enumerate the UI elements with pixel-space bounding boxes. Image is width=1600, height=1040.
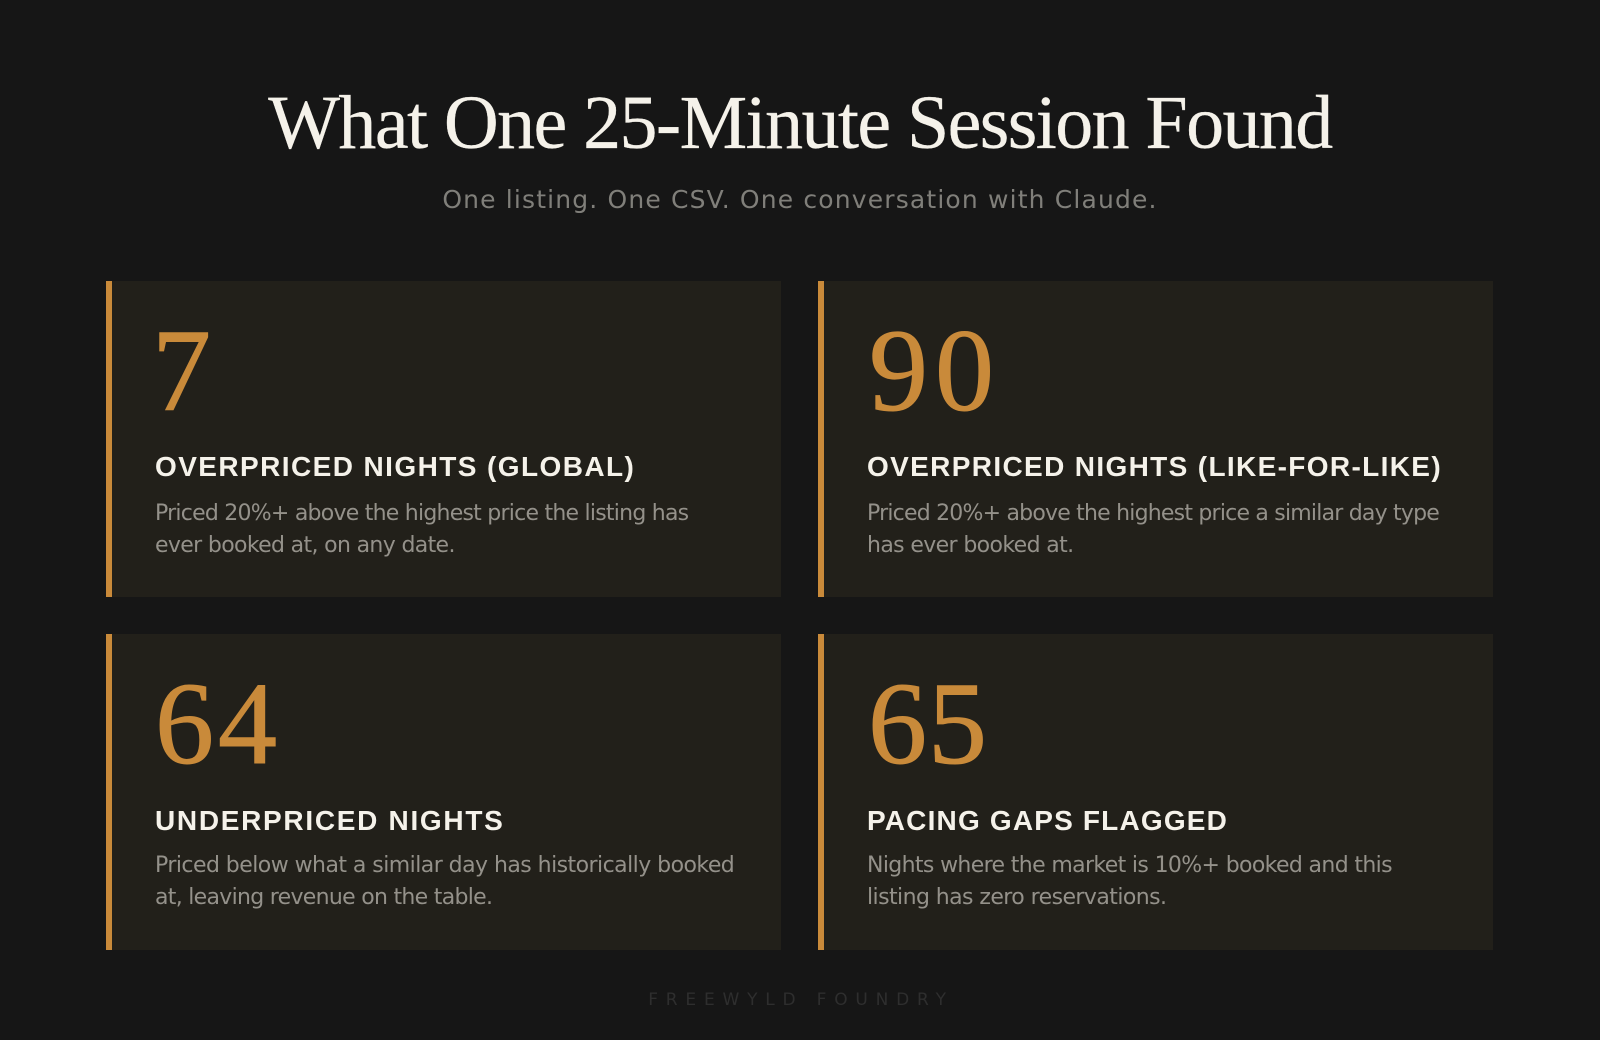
description: overpriced global bbox=[155, 501, 688, 558]
description: overpriced global: Priced 20%+ above the highest price the listing has bbox=[155, 501, 688, 526]
heading: underpriced nights: UNDERPRICED NIGHTS bbox=[155, 805, 505, 836]
heading: pacing gaps flagged: PACING GAPS FLAGGED bbox=[867, 805, 1228, 836]
panel: overpriced nights global bbox=[106, 281, 781, 597]
heading: overpriced nights like-for-like: OVERPRICED NIGHTS (LIKE-FOR-LIKE) bbox=[867, 451, 1442, 482]
description: pacing gaps: Nights where the market is 10%+ booked and this bbox=[867, 853, 1392, 878]
panel: overpriced nights like-for-like bbox=[818, 281, 1493, 597]
stat: 90: 90 bbox=[869, 305, 1001, 436]
description: overpriced global: ever booked at, on any date. bbox=[155, 533, 455, 558]
stat: 64: 64 bbox=[155, 658, 281, 789]
stat: 7: 7 bbox=[152, 305, 216, 436]
description: pacing gaps bbox=[867, 853, 1392, 910]
description: overpriced like-for-like: has ever booked at. bbox=[867, 533, 1073, 558]
panel: pacing gaps flagged bbox=[818, 634, 1493, 950]
footer: FREEWYLD FOUNDRY bbox=[648, 990, 954, 1010]
subtitle: One listing. One CSV. One conversation with Claude. bbox=[442, 185, 1158, 214]
description: overpriced like-for-like bbox=[867, 501, 1439, 558]
description: overpriced like-for-like: Priced 20%+ above the highest price a similar day type bbox=[867, 501, 1439, 526]
panel: underpriced nights bbox=[106, 634, 781, 950]
title: What One 25-Minute Session Found bbox=[268, 81, 1332, 165]
description: pacing gaps: listing has zero reservations. bbox=[867, 885, 1166, 910]
stat: 65: 65 bbox=[868, 658, 988, 789]
heading: overpriced nights global: OVERPRICED NIGHTS (GLOBAL) bbox=[155, 451, 635, 482]
description: underpriced: Priced below what a similar day has historically booked bbox=[155, 853, 734, 878]
description: underpriced bbox=[155, 853, 734, 910]
description: underpriced: at, leaving revenue on the table. bbox=[155, 885, 492, 910]
